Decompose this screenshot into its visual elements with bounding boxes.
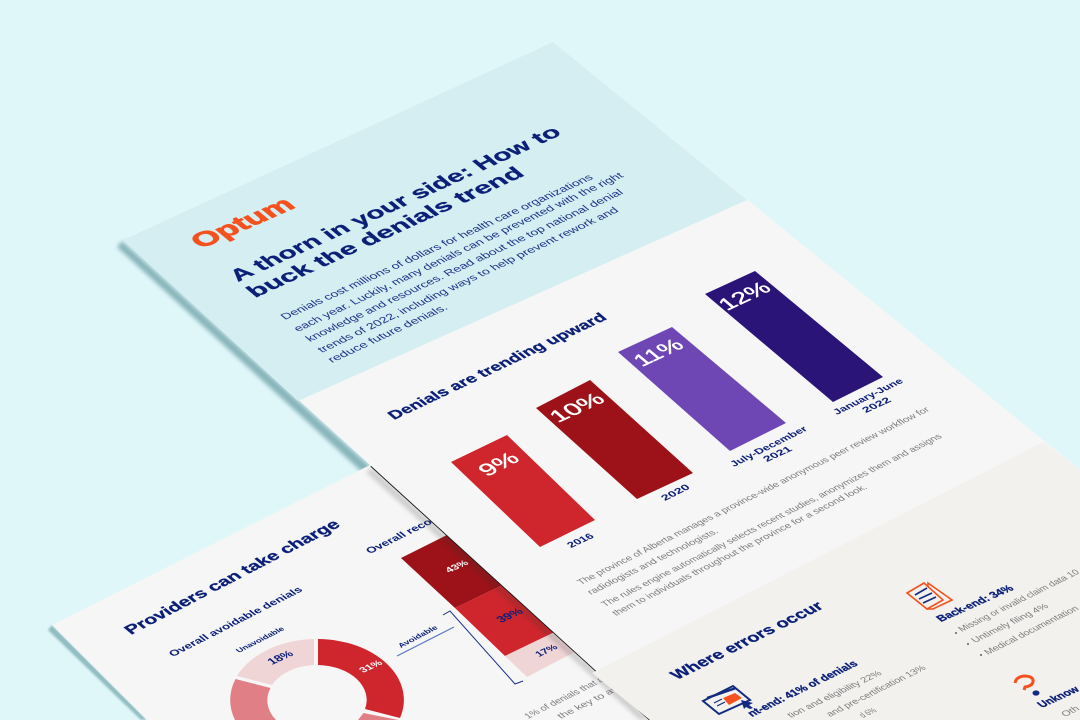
panel: where errors occur: [592, 442, 1080, 720]
front-end section: [745, 659, 928, 719]
title: buck the denials trend: [242, 164, 530, 301]
intro text: [278, 171, 627, 365]
text block: alberta paragraph: radiologists and technologists.: [584, 527, 721, 596]
donut chart: [230, 639, 404, 720]
text block: alberta paragraph: [574, 405, 945, 617]
bar: july-december 2021: [618, 327, 810, 468]
unknown section: [1035, 685, 1080, 718]
bar: 2016: 2016: [564, 532, 596, 549]
text block: alberta paragraph: them to individuals throughout the province for a second look.: [609, 482, 870, 617]
bar: january-june 2022: [705, 271, 906, 416]
stacked bar chart: 43%: [442, 558, 471, 574]
text block: alberta paragraph: The province of Alberta manages a province-wide anonymous peer review workflow for: [574, 405, 932, 586]
bar: 2016: 9%: [474, 449, 525, 480]
front-end section: and pre-certification 13%: [823, 663, 928, 718]
bar: 2020: 10%: [545, 390, 610, 426]
stacked bar chart: 39%: [494, 607, 527, 625]
text block: back page note: 1% of denials that are: [521, 671, 615, 720]
bar chart: [451, 271, 906, 549]
intro text: trends of 2022, including ways to help prevent rework and: [315, 206, 622, 355]
subheading: overall recoverable denials: Overall recoverable denials: [363, 479, 514, 556]
unknown section: Unknow: [1035, 685, 1080, 710]
bar: july-december 2021: 2021: [760, 445, 795, 463]
icon: browser window: [703, 686, 753, 714]
intro text: each year. Luckily, many denials can be prevented with the right: [291, 171, 627, 334]
back-end section: Missing or invalid claim data 10: [955, 567, 1080, 633]
text block: back page note: the key to avoid: [554, 677, 635, 720]
front-end section: nt-end: 41% of denials: [745, 659, 861, 719]
back page: providers can take charge: [52, 450, 700, 720]
bar: january-june 2022: 12%: [714, 279, 777, 314]
icon: question mark: [1015, 676, 1040, 696]
title: A thorn in your side: How to: [225, 123, 567, 285]
text block: back page note: [521, 671, 635, 720]
bar: july-december 2021: 11%: [629, 336, 689, 370]
text block: alberta paragraph: The rules engine automatically selects recent studies, anonymizes them and assigns: [598, 431, 945, 608]
panel: header: [123, 42, 747, 401]
heading: providers can take charge: Providers can take charge: [121, 518, 345, 638]
back-end section: Untimely filing 4%: [968, 601, 1051, 644]
label: unavoidable: Unavoidable: [235, 626, 287, 654]
heading: where errors occur: Where errors occur: [667, 599, 828, 683]
unknown section: Oth: [1058, 704, 1080, 718]
bar: 2016: [451, 435, 596, 549]
bar: january-june 2022: January-June: [830, 376, 906, 416]
back-end section: Back-end: 34%: [934, 584, 1017, 624]
donut chart: 18%: [265, 649, 297, 667]
title: [225, 123, 567, 301]
intro text: Denials cost millions of dollars for health care organizations: [278, 173, 596, 322]
bar: january-june 2022: 2022: [859, 396, 894, 414]
bracket: avoidable: [397, 611, 523, 684]
stacked bar chart: 17%: [532, 642, 560, 658]
logo: optum: Optum: [184, 193, 301, 252]
front-end section: tion and eligibility 22%: [784, 669, 884, 719]
subheading: overall avoidable denials: Overall avoidable denials: [166, 585, 306, 659]
bar: july-december 2021: July-December: [727, 424, 810, 468]
icon: documents: [907, 583, 952, 609]
donut chart: 31%: [356, 658, 385, 674]
intro text: knowledge and resources. Read about the top national denial: [303, 188, 626, 344]
bar: 2020: 2020: [658, 483, 693, 502]
front-end section: d 6%: [856, 706, 879, 719]
back-end section: [934, 567, 1080, 656]
stacked bar chart: [401, 518, 613, 677]
back-end section: Medical documentation: [981, 604, 1080, 656]
intro text: reduce future denials.: [325, 303, 451, 365]
heading: denials are trending upward: Denials are trending upward: [383, 310, 610, 422]
bar: 2020: [536, 380, 693, 502]
bracket: avoidable: Avoidable: [397, 625, 440, 649]
